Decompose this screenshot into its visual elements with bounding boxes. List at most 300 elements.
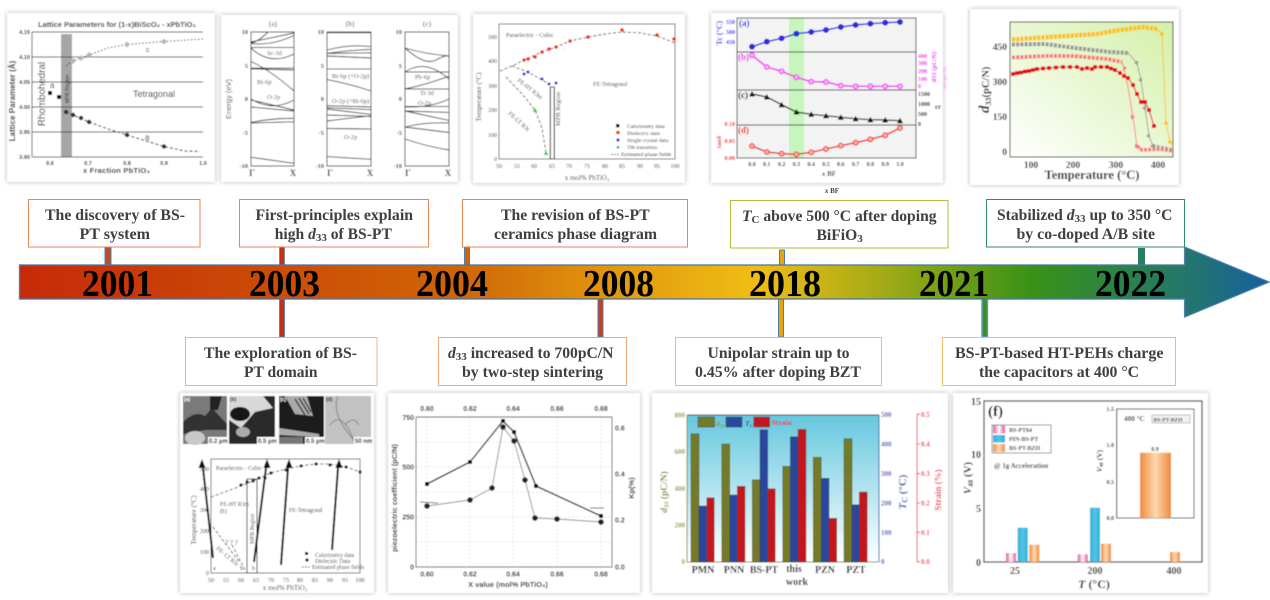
year labels: 2018	[749, 263, 821, 305]
phase text	[506, 33, 628, 134]
axis labels: 3.90	[19, 155, 30, 161]
strain axis	[917, 411, 943, 566]
callout: two-step sintering: increased to 700pC/N	[467, 345, 614, 362]
callout: phase diagram revision 2004	[462, 200, 688, 247]
legend: BS-PT-BZH	[1009, 446, 1040, 452]
categories: PZT	[846, 565, 866, 576]
phase axes: 50	[208, 577, 214, 584]
band axes labels: 10	[242, 29, 248, 36]
band annotations: O-2p	[418, 100, 431, 107]
callout: domain exploration: PT domain	[244, 364, 318, 381]
axis labels: 0.7	[852, 162, 859, 168]
band axes labels: 0	[321, 96, 324, 103]
phase text: b	[240, 566, 243, 572]
callout: Tc above 500	[730, 200, 948, 248]
band annotations: Bi-6p	[257, 79, 272, 86]
micrograph d: 50 nm	[355, 439, 372, 445]
band axes labels: Γ	[405, 168, 411, 178]
left axis	[659, 412, 686, 566]
axes text: 0	[410, 564, 414, 572]
phase axes: 80	[297, 577, 303, 584]
axis labels: 4.05	[19, 80, 30, 86]
legend: Single crystal data	[627, 138, 669, 144]
legend: BS-PT64	[1009, 428, 1032, 434]
band axes labels: 5	[399, 63, 402, 70]
band axes labels: 0	[245, 96, 248, 103]
axes: 90	[637, 164, 643, 170]
callout: phase diagram revision 2004: ceramics phase diagram	[494, 226, 657, 243]
phase axes: 70	[268, 577, 274, 584]
axes text: (pC/N)	[981, 66, 992, 98]
phase axes: 500	[200, 466, 209, 473]
band annotations: Ti-3d	[420, 90, 435, 97]
MPB frame	[247, 479, 257, 573]
axes text: 0.64	[506, 406, 520, 413]
phase axes: 95	[342, 577, 348, 584]
axis labels: 4.15	[19, 30, 30, 36]
axis labels: 0	[918, 122, 921, 128]
callout: first principles 2003: high d	[275, 226, 316, 243]
plot frame	[499, 24, 675, 159]
legend: C	[750, 424, 754, 430]
left axis: 600	[674, 448, 686, 456]
inset chart: 1.0	[1106, 443, 1114, 449]
axes: 300	[488, 84, 497, 90]
annotation: @ 1g Acceleration	[994, 462, 1048, 470]
curve b	[752, 55, 900, 86]
callout: Tc above 500: T	[742, 208, 753, 225]
axes: 5	[976, 504, 981, 515]
letter tags: (d)	[738, 125, 749, 135]
axes text: 200	[1066, 161, 1080, 171]
axes: T (°C)	[1078, 577, 1110, 591]
energy axis title: Energy (eV)	[224, 78, 233, 119]
axis labels: 0.6	[837, 162, 845, 168]
curve c	[752, 94, 900, 121]
band axes labels: -10	[393, 163, 402, 170]
legend	[611, 124, 671, 158]
axes text: 500	[402, 464, 414, 472]
panel: piezoelectric coefficient chart	[388, 393, 640, 593]
plot background and band	[737, 18, 916, 158]
stems above bar	[105, 247, 1145, 265]
lattice c curve	[66, 38, 203, 66]
callout: stabilized d33: Stabilized d	[997, 207, 1075, 224]
band annotations: (b)	[346, 19, 355, 28]
Tc axis: 100	[881, 529, 892, 537]
axes: 25	[1010, 566, 1020, 577]
callout: two-step sintering: d	[448, 345, 456, 362]
strain axis: 0.2	[921, 500, 930, 508]
bars 25 C	[1006, 528, 1039, 562]
axes text: 300	[1109, 161, 1123, 171]
axes text: 0	[1002, 148, 1007, 158]
axes text: 0.4	[615, 472, 625, 478]
axes text: 0.62	[463, 406, 477, 413]
phase boundaries	[500, 32, 675, 153]
phase labels: a	[145, 133, 150, 142]
band axes labels: -5	[243, 130, 248, 137]
axes: 60	[531, 164, 537, 170]
panel: strain bar chart	[652, 393, 948, 593]
panel: V40 voltage bar chart	[953, 393, 1208, 593]
legend: Tilt transition	[627, 145, 658, 151]
phase text: Calorimetry data	[315, 553, 355, 559]
axis labels: 1.0	[896, 162, 904, 168]
legend: Dielectric data	[627, 131, 660, 137]
band annotations: O-2p	[267, 94, 280, 101]
Tc axis: 200	[881, 500, 892, 508]
axes text: 250	[402, 514, 414, 522]
letter tags: (c)	[738, 90, 748, 100]
band annotations: (a)	[269, 19, 278, 28]
bands (b)	[327, 33, 371, 159]
axes text: Temperature (°C)	[1045, 168, 1139, 182]
callout: discovery 2001	[28, 200, 200, 247]
Tc axis: 500	[881, 411, 892, 419]
axis labels: 4.00	[19, 105, 30, 111]
phase labels: c	[146, 47, 150, 54]
micrograph a: (a)	[184, 397, 190, 403]
axes: 0	[976, 558, 981, 569]
year labels	[82, 263, 1166, 305]
band axes labels: 0	[399, 96, 402, 103]
axis labels: 1000	[918, 102, 930, 108]
year labels: 2021	[919, 263, 989, 305]
axis labels: 200	[918, 69, 927, 75]
axes: 400	[488, 59, 497, 65]
Tc axis: C	[900, 497, 910, 503]
axes text: 300	[993, 78, 1007, 88]
legend: PIN-BS-PT	[1009, 437, 1038, 443]
phase axes: 100	[355, 577, 365, 584]
callout: unipolar strain	[676, 338, 882, 386]
axes text: 0.68	[594, 572, 608, 578]
phase axes: 90	[327, 577, 333, 584]
chart title: Lattice Parameters for (1-x)BiScO₃ - xPbTiO₃	[38, 20, 196, 29]
axes text: Kp(%)	[627, 477, 636, 499]
phase axes: 400	[200, 486, 209, 493]
axes: 40	[967, 479, 975, 487]
axes text	[390, 406, 636, 589]
band annotations: O-2p	[344, 134, 357, 141]
small arrows	[420, 502, 604, 508]
band annotations	[257, 19, 435, 141]
axis labels: 0.05	[724, 139, 735, 145]
stems below bar	[280, 280, 988, 337]
legend	[698, 417, 793, 430]
year labels: 2022	[1095, 263, 1166, 305]
axis labels: 0.00	[724, 156, 735, 162]
axis labels: 0.8	[867, 162, 874, 168]
left axis: 800	[674, 412, 686, 420]
axes text: 0.60	[420, 406, 434, 413]
callout: first principles 2003: First-principles explain	[256, 207, 413, 224]
axis labels: 0.2	[778, 162, 785, 168]
axes: 50	[496, 164, 502, 170]
axis labels: 0.3	[793, 162, 800, 168]
axis labels: 0.9	[160, 161, 168, 167]
callout: unipolar strain: 0.45% after doping BZT	[695, 364, 862, 381]
legend: T	[745, 419, 750, 428]
axes text: 0.66	[550, 406, 564, 413]
phase axes: 65	[253, 577, 259, 584]
micrograph c: 0.5 µm	[306, 439, 325, 445]
curve a	[752, 22, 900, 47]
strain axis: 0.3	[921, 470, 930, 478]
callout: Tc above 500: C	[752, 214, 760, 226]
band axes labels: Γ	[327, 168, 333, 178]
band axes labels: 10	[318, 29, 324, 36]
left axis: d	[660, 508, 670, 513]
data points	[524, 30, 674, 155]
legend	[992, 425, 1051, 453]
axis labels: x BF	[821, 170, 836, 178]
axis labels: 0.5	[822, 162, 830, 168]
year labels: 2001	[82, 263, 153, 305]
axis labels: 1500	[918, 92, 930, 98]
phase axes	[190, 466, 365, 592]
axes: (V)	[962, 461, 974, 480]
phase labels: Tetragonal	[133, 89, 175, 99]
strain axis: 0.5	[921, 411, 930, 419]
axis labels: d33 (pC/N)	[942, 67, 947, 89]
axes: 55	[514, 164, 520, 170]
frame	[984, 401, 1202, 562]
axis labels: 0.10	[724, 122, 735, 128]
axes: 65	[549, 164, 555, 170]
Tc axis	[881, 411, 910, 566]
axis labels: 0.4	[807, 162, 815, 168]
axes: 400	[1166, 566, 1182, 577]
axis labels: 0.7	[84, 161, 92, 167]
band axes labels: 5	[245, 63, 248, 70]
Tc axis: 300	[881, 470, 892, 478]
bars: this work	[783, 429, 806, 562]
band axes labels: 10	[396, 29, 402, 36]
plot area	[1010, 22, 1173, 157]
strain axis: Strain (%)	[933, 469, 943, 511]
micrograph c	[279, 396, 325, 445]
tag: (f)	[988, 404, 1003, 420]
panel: domain images and phase diagram	[180, 393, 374, 593]
band axes labels: -10	[315, 163, 324, 170]
callout: harvesters at 400 C: BS-PT-based HT-PEHs charge	[955, 345, 1164, 362]
axes text: piezoelectric coefficient (pC/N)	[390, 443, 399, 552]
axis labels: 0.9	[881, 162, 889, 168]
phase text: FE- LT R3c	[215, 546, 240, 568]
callout: stabilized d33: by co-doped A/B site	[1016, 226, 1155, 243]
phase plot frame	[211, 459, 360, 573]
arrows to micrographs	[198, 459, 342, 565]
phase labels: MPB Region	[65, 75, 71, 103]
band axes labels: -5	[397, 130, 402, 137]
axes text: 0.66	[550, 572, 564, 578]
red series	[1013, 67, 1154, 126]
left axis: 0	[682, 558, 686, 566]
axis labels: 0	[918, 84, 921, 90]
phase text: MPB Region	[555, 91, 562, 126]
panel: band structures	[221, 15, 458, 182]
bars 200 C	[1078, 508, 1111, 562]
axis labels: 0.1	[763, 162, 771, 168]
categories: work	[786, 577, 809, 588]
axes text	[977, 43, 1165, 182]
phase text: Estimated phase fields	[312, 564, 365, 571]
categories	[692, 564, 866, 588]
callout: phase diagram revision 2004: The revision of BS-PT	[501, 207, 650, 224]
axes text: 0.2	[615, 518, 625, 524]
axes: 200	[488, 108, 497, 114]
band annotations: O-2p (+Bi-6p)	[332, 98, 369, 105]
axes: 500	[488, 35, 497, 41]
callout: first principles 2003	[240, 200, 428, 247]
strain axis: 0.4	[921, 440, 930, 448]
callout: domain exploration: The exploration of BS-	[204, 345, 357, 362]
phase text: MPB Region	[250, 513, 256, 544]
Tc axis: 0	[881, 558, 885, 566]
callout: Tc above 500: 3	[857, 233, 863, 245]
axis labels: 400	[918, 54, 927, 60]
callout: first principles 2003: 33	[316, 232, 327, 244]
axes: 15	[971, 397, 981, 408]
axes text: X value (mol% PbTiO₃)	[468, 580, 548, 589]
axis labels: 4.10	[19, 55, 30, 61]
chart background	[687, 415, 879, 562]
phase text: FE-Tetragonal	[593, 82, 628, 88]
callout: two-step sintering	[438, 338, 626, 386]
band annotations: Bi-6p (+O-2p)	[332, 73, 369, 80]
stray x BF label: x BF	[824, 187, 839, 195]
callout: Tc above 500: BiFiO	[816, 227, 857, 244]
axis labels	[715, 20, 947, 178]
bars: PZN	[813, 457, 837, 562]
callout: stabilized d33: 33	[1075, 213, 1086, 225]
bands (c)	[405, 32, 449, 150]
micrograph b: (b)	[230, 397, 237, 403]
axes: V	[962, 485, 974, 494]
band axes labels: X	[445, 168, 452, 178]
callout: two-step sintering: 33	[456, 351, 467, 363]
axis labels: 500	[918, 112, 927, 118]
Tc axis: T	[897, 501, 909, 509]
lattice a curve	[48, 91, 200, 152]
callout: unipolar strain: Unipolar strain up to	[708, 345, 850, 362]
left axis: (pC/N)	[659, 471, 670, 502]
axes: 75	[584, 164, 590, 170]
axes text: 450	[993, 43, 1007, 53]
panel: d33 versus temperature	[970, 9, 1179, 185]
micrograph d: (d)	[326, 397, 333, 403]
gray series	[1012, 44, 1173, 150]
phase axes: 200	[200, 528, 209, 535]
phase text: a	[213, 566, 216, 572]
categories: PZN	[815, 565, 836, 576]
axis labels: 3.95	[19, 130, 30, 136]
stacked frames	[737, 18, 916, 158]
axis labels: 450	[726, 40, 735, 46]
axes text: 0.6	[615, 426, 625, 432]
axes text: 400	[1151, 161, 1165, 171]
axis labels: 1.0	[199, 161, 207, 167]
phase points	[241, 464, 360, 485]
left axis: 200	[674, 522, 686, 530]
inset chart: BS-PT-BZH	[1154, 418, 1183, 424]
bars: PNN	[722, 444, 745, 562]
phase axes: 300	[200, 507, 209, 514]
phase text: Paraelectric - Cubic	[216, 466, 262, 472]
inset chart: 0.5	[1106, 480, 1114, 486]
axes: 95	[654, 164, 660, 170]
band axes labels: -10	[239, 163, 248, 170]
micrograph d	[325, 396, 372, 445]
axes: 0	[494, 157, 497, 163]
phase text: ? ? ?	[225, 539, 238, 547]
phase axes: 55	[223, 577, 229, 584]
letter tags: (b)	[738, 52, 749, 62]
phase axes: Temperature (°C)	[190, 495, 198, 545]
panel: lattice parameters chart	[7, 13, 215, 182]
legend: Strain	[772, 418, 793, 427]
letter tags	[738, 18, 750, 135]
bars: BS-PT	[752, 430, 775, 562]
phase axes: x mol% PbTiO₃	[263, 584, 308, 592]
axis labels	[19, 30, 207, 167]
x axis title: x Fraction PbTiO₃	[83, 166, 150, 175]
inset chart: (V)	[1095, 449, 1104, 462]
axis labels: tanδ	[716, 135, 723, 148]
legend: d	[716, 419, 720, 428]
timeline arrow	[20, 247, 1269, 317]
inset chart: 40	[1100, 462, 1105, 467]
axis labels: 500	[726, 30, 735, 36]
legend: Estimated phase fields	[621, 151, 671, 158]
callout: stabilized d33: up to 350 °C	[1086, 207, 1172, 224]
axes: 100	[670, 164, 680, 170]
band annotations: Pb-6p	[415, 74, 430, 81]
inset chart: 0.0	[1106, 516, 1114, 522]
phase text: Dielectric Data	[315, 559, 351, 565]
strain axis: 0.1	[921, 529, 930, 537]
categories: PNN	[724, 565, 745, 576]
strain axis: 0.0	[921, 558, 930, 566]
axis labels: 300	[918, 61, 927, 67]
legend: Calorimetry data	[627, 124, 665, 130]
band axes labels: X	[290, 168, 297, 178]
callout: harvesters at 400 C	[942, 338, 1176, 386]
inset chart: V	[1095, 466, 1104, 472]
micrograph c: (c)	[280, 397, 286, 403]
band axes labels: X	[367, 168, 374, 178]
left axis: 33	[664, 501, 670, 508]
phase labels	[37, 47, 175, 142]
bars: PMN	[691, 434, 714, 562]
micrograph a	[183, 396, 228, 445]
axes: 80	[602, 164, 608, 170]
square series	[427, 421, 601, 516]
inset chart: 0.9	[1151, 447, 1159, 453]
inset chart: 400 °C	[1124, 415, 1145, 423]
legend: 33	[719, 424, 725, 430]
left axis: 400	[674, 485, 686, 493]
callout: Tc above 500: above 500 °C after doping	[759, 208, 937, 225]
categories: PMN	[692, 565, 715, 576]
axis labels: Tc (°C)	[715, 20, 724, 45]
callout: first principles 2003: of BS-PT	[327, 226, 392, 243]
yellow series	[1012, 27, 1173, 146]
panel: BiFeO3 doping stacked chart	[711, 13, 947, 183]
axes text: d	[977, 105, 993, 113]
